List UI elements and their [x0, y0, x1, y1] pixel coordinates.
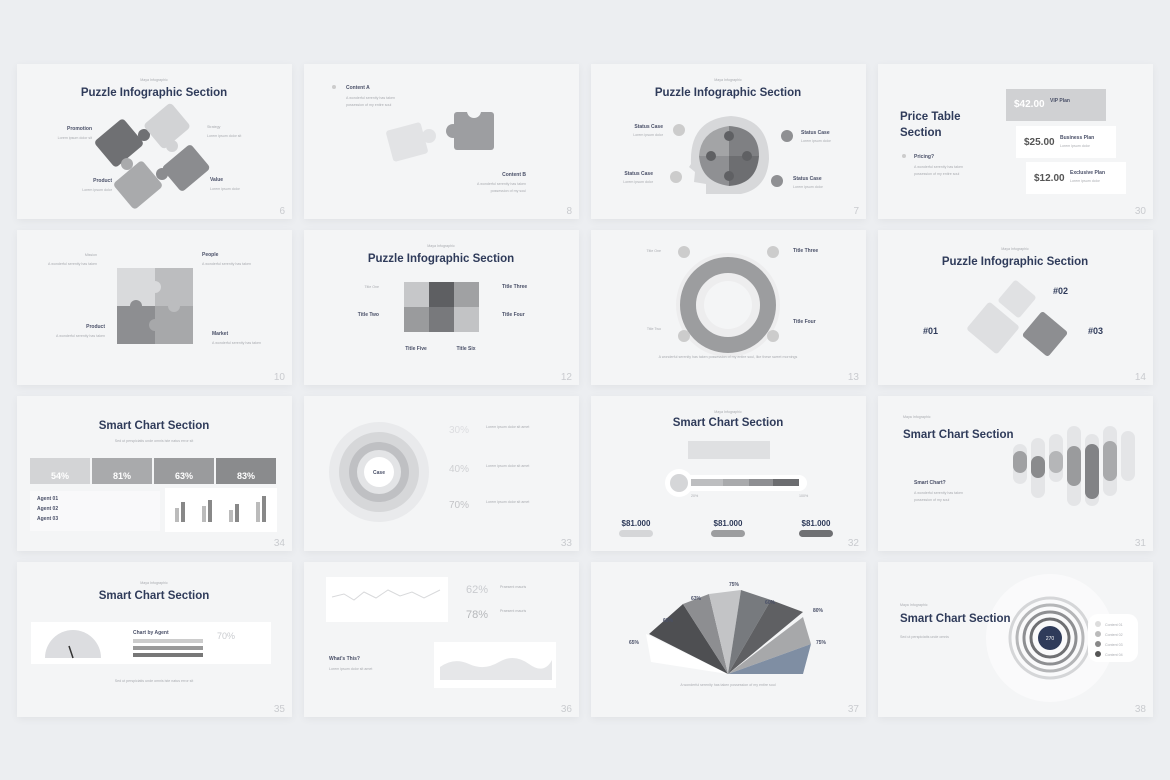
legend: Content 02 [1105, 633, 1123, 637]
slide 7: circular cycle [591, 230, 866, 385]
bar chart [165, 488, 277, 532]
percentages [449, 425, 529, 511]
labels: Lorem ipsum dolor sit [58, 136, 92, 140]
title: Smart Chart Section [99, 590, 209, 602]
slide 14: line charts [304, 562, 579, 717]
numbers: #03 [1088, 326, 1103, 336]
title [99, 420, 209, 443]
pricing text: Pricing? [914, 154, 934, 160]
title: Sed ut perspiciatis unde omnis [900, 635, 949, 639]
percentages: 30% [449, 425, 469, 436]
page number: 31 [1135, 538, 1146, 549]
values: $81.000 [802, 519, 831, 528]
stats: 62% [466, 584, 488, 596]
page number: 30 [1135, 206, 1146, 217]
table [30, 491, 160, 531]
status labels: Lorem ipsum dolor [793, 185, 824, 189]
title [900, 111, 961, 139]
icons & labels: Title Four [793, 319, 816, 325]
caption: A wonderful serenity has taken possession of my entire soul [680, 683, 776, 687]
labels: Product [86, 324, 105, 330]
titles: Title Four [502, 312, 525, 318]
title [368, 244, 514, 265]
price cards: Business Plan [1060, 135, 1094, 141]
labels: Promotion [67, 126, 92, 132]
percent labels: 60% [663, 618, 674, 624]
status labels [623, 124, 832, 189]
slide 3: head diagram [591, 64, 866, 219]
pricing text: A wonderful serenity has taken [914, 165, 963, 169]
title: Price Table [900, 111, 961, 123]
title: Smart Chart Section [673, 417, 783, 429]
stats [466, 584, 526, 621]
icons & labels: Title One [647, 249, 661, 253]
slide 11: thermometer [591, 396, 866, 551]
percent boxes: 54% [51, 471, 69, 481]
labels: Lorem ipsum dolor sit [207, 134, 241, 138]
numbers: #01 [923, 326, 938, 336]
slide 1: puzzle infographic [17, 64, 292, 219]
pills [1013, 426, 1135, 506]
title: Puzzle Infographic Section [942, 256, 1088, 268]
labels: A wonderful serenity has taken [202, 262, 251, 266]
title: Maya Infographic [427, 244, 455, 248]
titles: Title Three [502, 284, 527, 290]
title: Maya Infographic [714, 78, 742, 82]
content B: Content B [502, 172, 526, 178]
percent labels: 60% [765, 600, 776, 606]
slide 9: percentage table [17, 396, 292, 551]
labels: Market [212, 331, 228, 337]
price cards: $42.00 [1014, 99, 1045, 110]
rings: 270 [1046, 636, 1054, 642]
percentages: Lorem ipsum dolor sit amet [486, 500, 529, 504]
page number: 12 [561, 372, 572, 383]
rings [986, 574, 1114, 702]
puzzle grid [404, 282, 479, 332]
percent labels: 80% [813, 608, 824, 614]
title [655, 78, 801, 99]
labels: Product [93, 178, 112, 184]
page number: 38 [1135, 704, 1146, 715]
percentages: Lorem ipsum dolor sit amet [486, 464, 529, 468]
page number: 37 [848, 704, 859, 715]
page number: 8 [566, 206, 572, 217]
title: Smart Chart Section [99, 420, 209, 432]
what's this [329, 656, 372, 671]
labels: A wonderful serenity has taken [212, 341, 261, 345]
titles: Title Two [358, 312, 379, 318]
caption: Sed ut perspiciatis unde omnis iste natus error sit [115, 679, 193, 683]
gauge card [31, 622, 271, 664]
title: Puzzle Infographic Section [81, 87, 227, 99]
page number: 33 [561, 538, 572, 549]
percent boxes: 81% [113, 471, 131, 481]
titles: Title Six [456, 346, 476, 352]
status labels: Lorem ipsum dolor [801, 139, 832, 143]
icons & labels [647, 246, 818, 359]
page number: 35 [274, 704, 285, 715]
fan [646, 590, 811, 674]
title: Maya Infographic [140, 78, 168, 82]
slide 4: price table [878, 64, 1153, 219]
price cards: Lorem ipsum dolor [1070, 179, 1101, 183]
text: possession of my soul [914, 498, 950, 502]
percent boxes: 63% [175, 471, 193, 481]
area chart card [434, 642, 556, 688]
thermometer [665, 469, 809, 498]
titles: Title Five [405, 346, 427, 352]
labels: Mission [85, 253, 97, 257]
icons & labels: Title Two [647, 327, 661, 331]
percent labels: 75% [729, 582, 740, 588]
title [903, 415, 1014, 441]
title: Puzzle Infographic Section [368, 253, 514, 265]
content A: A wonderful serenity has taken [346, 96, 395, 100]
percentages: Lorem ipsum dolor sit amet [486, 425, 529, 429]
content B: A wonderful serenity has taken [477, 182, 526, 186]
percent labels: 65% [629, 640, 640, 646]
numbers [923, 286, 1103, 336]
titles [358, 284, 527, 352]
what's this: What's This? [329, 656, 360, 662]
title: Section [900, 127, 942, 139]
labels: Lorem ipsum dolor [82, 188, 113, 192]
page number: 14 [1135, 372, 1146, 383]
title: Maya Infographic [140, 581, 168, 585]
circles [329, 422, 429, 522]
puzzle pieces [385, 104, 494, 162]
slide 15: fan chart [591, 562, 866, 717]
price cards: $12.00 [1034, 173, 1065, 184]
slide 10: concentric circles [304, 396, 579, 551]
titles: Title One [365, 285, 379, 289]
labels: A wonderful serenity has taken [56, 334, 105, 338]
slide 8: puzzle 3 pieces [878, 230, 1153, 385]
content B [477, 172, 526, 193]
title: Maya Infographic [903, 415, 931, 419]
table: Agent 01 [37, 496, 58, 502]
gauge card: Chart by Agent [133, 630, 169, 636]
puzzle grid [117, 268, 193, 344]
status labels: Lorem ipsum dolor [633, 133, 664, 137]
title [99, 581, 209, 602]
percentages: 70% [449, 500, 469, 511]
ring [676, 253, 780, 357]
status labels: Status Case [793, 176, 822, 182]
icons & labels: A wonderful serenity has taken possession of my entire soul, like these sweet mornings [659, 355, 798, 359]
content A [332, 85, 395, 107]
circles: Case [373, 470, 385, 476]
labels: Value [210, 177, 223, 183]
title: Maya Infographic [1001, 247, 1029, 251]
table: Agent 02 [37, 506, 58, 512]
status labels: Status Case [624, 171, 653, 177]
thermometer: 20% [691, 494, 699, 498]
values: $81.000 [714, 519, 743, 528]
what's this: Lorem ipsum dolor sit amet [329, 667, 372, 671]
legend: Content 04 [1105, 653, 1123, 657]
status labels: Status Case [801, 130, 830, 136]
title: Puzzle Infographic Section [655, 87, 801, 99]
gauge card: 70% [217, 631, 235, 641]
title [942, 247, 1088, 268]
title: Maya Infographic [900, 603, 928, 607]
price cards: Lorem ipsum dolor [1060, 144, 1091, 148]
text [914, 480, 963, 502]
legend: Content 01 [1105, 623, 1123, 627]
price cards: Exclusive Plan [1070, 170, 1105, 176]
status labels: Status Case [634, 124, 663, 130]
labels [58, 125, 241, 192]
text: A wonderful serenity has taken [914, 491, 963, 495]
stats: 78% [466, 609, 488, 621]
slide 5: 2x2 puzzle [17, 230, 292, 385]
stats: Praesent mauris [500, 585, 526, 589]
page number: 7 [853, 206, 859, 217]
head [689, 116, 769, 194]
legend [1088, 614, 1138, 662]
slide 2: two puzzle pieces [304, 64, 579, 219]
values: $81.000 [622, 519, 651, 528]
pricing text: possession of my entire soul [914, 172, 960, 176]
title [673, 410, 783, 429]
page number: 32 [848, 538, 859, 549]
stats: Praesent mauris [500, 609, 526, 613]
content B: possession of my soul [491, 189, 526, 193]
page number: 6 [279, 206, 285, 217]
title: Smart Chart Section [903, 429, 1014, 441]
slide 16: concentric ring chart [878, 562, 1153, 717]
labels: A wonderful serenity has taken [48, 262, 97, 266]
text: Smart Chart? [914, 480, 946, 486]
percent boxes [30, 458, 276, 484]
percentages: 40% [449, 464, 469, 475]
percent labels [629, 582, 827, 646]
content A: Content A [346, 85, 370, 91]
title [900, 603, 1011, 639]
title: Smart Chart Section [900, 613, 1011, 625]
content A: possession of my entire soul [346, 103, 392, 107]
icons & labels: Title Three [793, 248, 818, 254]
slide 6: 3x2 puzzle [304, 230, 579, 385]
price cards [1006, 89, 1126, 194]
page number: 34 [274, 538, 285, 549]
slide 13: gauge [17, 562, 292, 717]
title: Sed ut perspiciatis unde omnis iste natus error sit [115, 439, 193, 443]
values [619, 519, 833, 537]
puzzle pieces [94, 102, 211, 210]
legend: Content 03 [1105, 643, 1123, 647]
percent labels: 63% [691, 596, 702, 602]
price cards: $25.00 [1024, 137, 1055, 148]
title [81, 78, 227, 99]
labels [48, 252, 261, 345]
info box [688, 441, 770, 459]
labels: People [202, 252, 219, 258]
pricing text [902, 154, 963, 176]
percent labels: 75% [816, 640, 827, 646]
line chart card [326, 577, 448, 622]
numbers: #02 [1053, 286, 1068, 296]
page number: 10 [274, 372, 285, 383]
pieces [966, 279, 1068, 357]
thermometer: 100% [799, 494, 809, 498]
table: Agent 03 [37, 516, 58, 522]
labels: Strategy [207, 125, 221, 129]
page number: 13 [848, 372, 859, 383]
price cards: VIP Plan [1050, 98, 1070, 104]
page number: 36 [561, 704, 572, 715]
status labels: Lorem ipsum dolor [623, 180, 654, 184]
title: Maya Infographic [714, 410, 742, 414]
percent boxes: 83% [237, 471, 255, 481]
slide 12: vertical pill chart [878, 396, 1153, 551]
labels: Lorem ipsum dolor [210, 187, 241, 191]
